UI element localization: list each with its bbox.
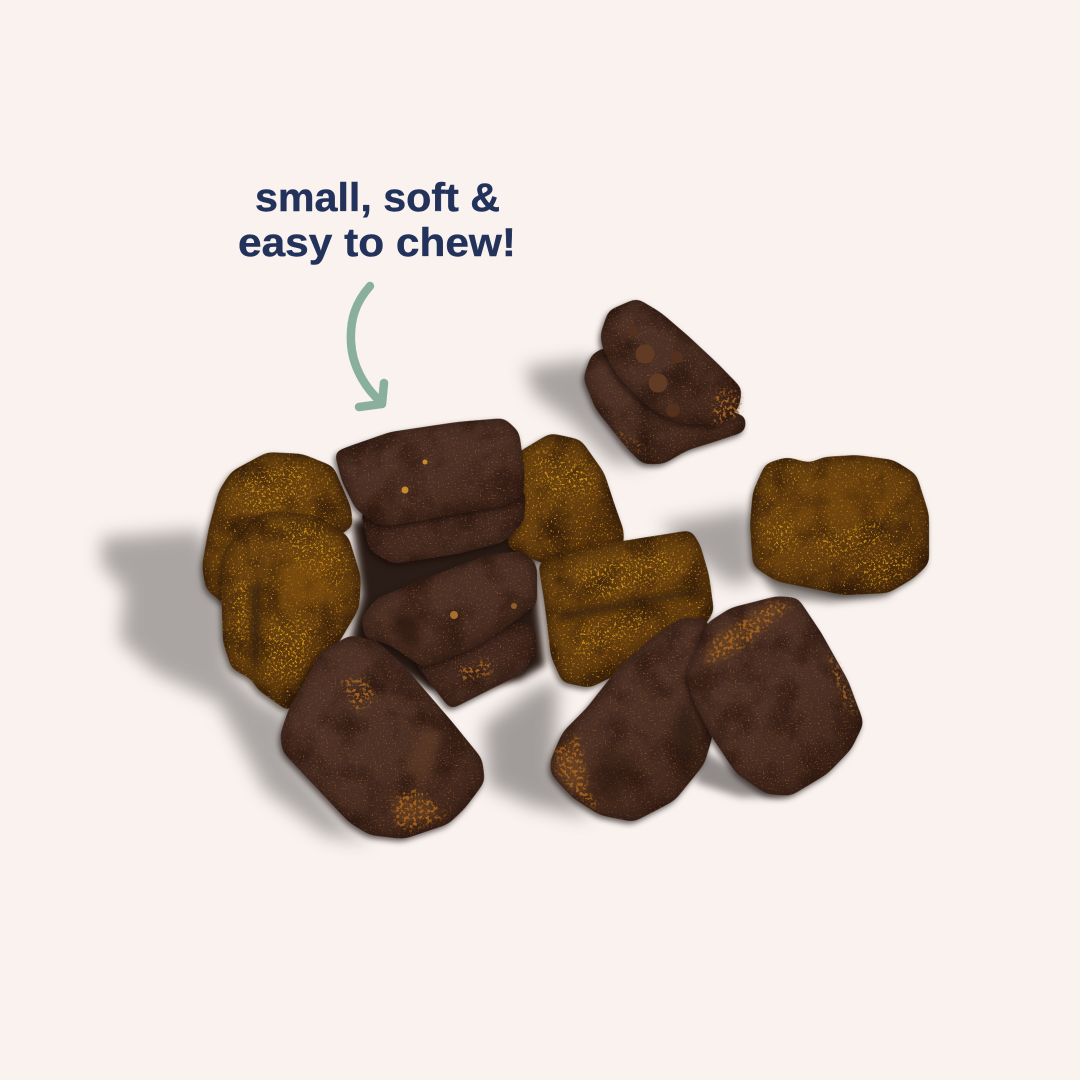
heading: easy to chew! [238,221,516,265]
chew: golden behind stack [505,431,626,566]
chew: stacked dark upper layer [332,416,526,528]
chew: golden far right [748,453,931,597]
chew: dark bottom center [548,616,715,824]
chew: big dark bottom left [278,633,487,841]
cast shadows [102,358,895,842]
heading: small, soft & [255,176,500,220]
chew: stacked dark lower layer [358,488,528,566]
chew: dark right [684,594,866,798]
chew: top right lower layer [581,344,748,466]
chew: golden back left [200,450,355,608]
chew: middle dark lower layer [410,620,539,712]
arrow [351,286,384,407]
chew: top right upper layer with bumps [598,296,744,428]
chew: golden front left [219,509,363,715]
heading [238,176,516,265]
chew: middle dark upper layer [359,549,539,670]
chew: golden center right [536,528,716,690]
